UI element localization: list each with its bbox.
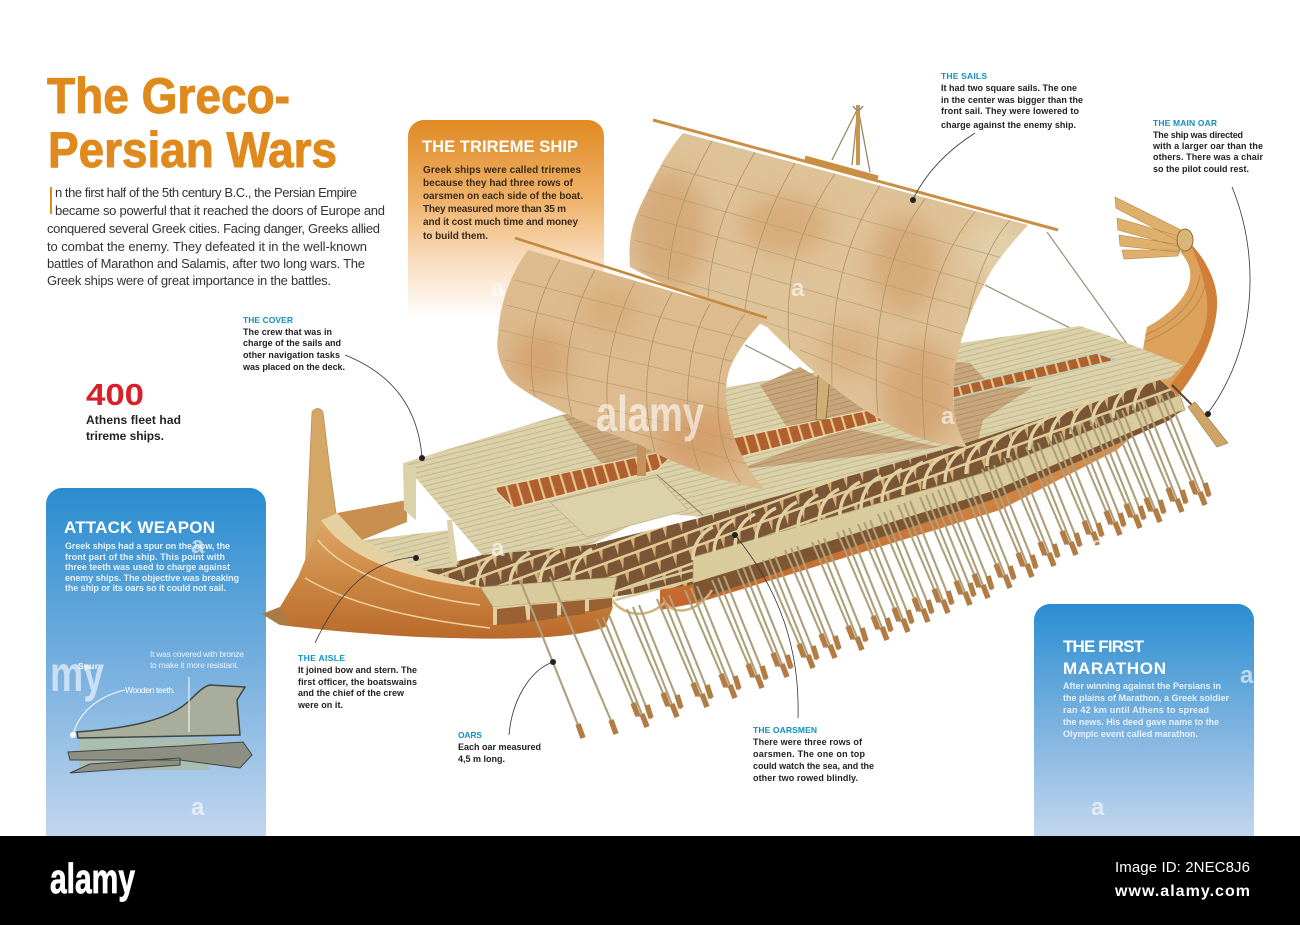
stern post and ornament — [1115, 197, 1217, 397]
callout: the sails: front sail. They were lowered to — [941, 106, 1080, 116]
watermark: a — [491, 535, 505, 562]
illustration: trireme ship — [262, 105, 1228, 738]
title — [47, 68, 337, 178]
watermark: a — [1240, 662, 1254, 689]
lattice between deck and rail — [423, 380, 1180, 597]
watermark: a — [1091, 532, 1105, 559]
callout: the sails: It had two square sails. The one — [941, 83, 1077, 93]
callout: the main oar: THE MAIN OAR — [1153, 118, 1217, 128]
ribs — [477, 377, 1154, 587]
callout: the aisle: were on it. — [297, 700, 343, 710]
watermark: my — [50, 646, 104, 702]
panel: the trireme ship: THE TRIREME SHIP — [422, 138, 578, 156]
callout: the sails: in the center was bigger than the — [941, 95, 1083, 105]
watermark: a — [1091, 794, 1105, 821]
callout: the main oar: others. There was a chair — [1153, 152, 1263, 162]
watermark: a — [491, 275, 505, 302]
callout: the main oar — [1152, 118, 1263, 417]
panel: the first marathon: After winning against the Persians in — [1063, 681, 1221, 691]
panel: the first marathon: the plains of Marathon, a Greek soldier — [1063, 693, 1229, 703]
callout: the sails: charge against the enemy ship. — [941, 120, 1076, 130]
callout: the oarsmen: THE OARSMEN — [753, 725, 817, 735]
intro text: to combat the enemy. They defeated it in the well-known — [47, 239, 367, 254]
main oar — [1172, 385, 1228, 447]
callout: the oarsmen: There were three rows of — [753, 737, 863, 747]
stat: 400 trireme ships — [86, 377, 181, 443]
watermark: a — [941, 403, 955, 430]
callout: the cover: THE COVER — [243, 315, 293, 325]
panel: the first marathon: MARATHON — [1063, 659, 1166, 678]
panel: attack weapon: the ship or its oars so it could not sail. — [65, 583, 226, 593]
panel: the trireme ship: oarsmen on each side of the boat. — [423, 191, 583, 202]
watermark: a — [791, 275, 805, 302]
panel: attack weapon: three teeth was used to charge against — [65, 562, 230, 572]
intro text: Greek ships were of great importance in the battles. — [47, 273, 331, 288]
callout: the sails: THE SAILS — [941, 71, 987, 81]
callout: oars: 4,5 m long. — [458, 754, 505, 764]
diagram: spur: Spur — [78, 661, 99, 671]
panel: attack weapon: front part of the ship. This point with — [65, 552, 225, 562]
callout: the cover — [242, 315, 425, 461]
callout: the aisle: It joined bow and stern. The — [298, 665, 417, 675]
callout: the main oar: so the pilot could rest. — [1153, 164, 1249, 174]
intro text: became so powerful that it reached the doors of Europe and — [55, 203, 385, 218]
panel: the trireme ship: because they had three rows of — [423, 178, 574, 189]
footer bar: alamy — [50, 855, 135, 902]
diagram: spur — [68, 649, 252, 773]
panel: the first marathon: ran 42 km until Athens to spread — [1063, 705, 1209, 715]
panel: the first marathon — [1034, 604, 1254, 836]
intro text — [47, 185, 385, 288]
diagram: spur: It was covered with bronze — [150, 649, 244, 659]
callout: the aisle: and the chief of the crew — [298, 688, 405, 698]
callout: oars — [458, 659, 556, 764]
masts — [637, 375, 830, 476]
intro text: n the first half of the 5th century B.C., the Persian Empire — [55, 185, 357, 200]
stat: 400 trireme ships: 400 — [86, 377, 144, 412]
footer bar: Image ID: 2NEC8J6 — [1115, 859, 1250, 876]
panel: attack weapon: ATTACK WEAPON — [64, 518, 215, 537]
callout: the sails — [910, 71, 1083, 203]
hull side right — [660, 397, 1177, 610]
stat: 400 trireme ships: trireme ships. — [86, 429, 164, 443]
main mast top — [832, 105, 870, 172]
hull and stern at left — [262, 408, 617, 639]
footer bar — [0, 836, 1300, 925]
callout: the cover: The crew that was in — [243, 327, 332, 337]
panel: the first marathon: the news. His deed gave name to the — [1063, 717, 1219, 727]
diagram: spur: to make it more resistant. — [150, 660, 239, 670]
intro text: battles of Marathon and Salamis, after two long wars. The — [47, 256, 365, 271]
front sail — [497, 238, 767, 490]
callout: oars: Each oar measured — [458, 742, 541, 752]
oars — [520, 393, 1209, 738]
callout: the cover: was placed on the deck. — [242, 362, 345, 372]
watermark — [50, 275, 1254, 821]
watermark: a — [191, 794, 205, 821]
callout: the aisle — [297, 555, 419, 710]
callout: the main oar: with a larger oar than the — [1152, 141, 1263, 151]
panel: the trireme ship: and it cost much time and money — [423, 217, 578, 228]
watermark: alamy — [596, 386, 704, 442]
panel: attack weapon — [46, 488, 266, 836]
ropes — [642, 228, 1130, 372]
footer bar: www.alamy.com — [1114, 883, 1250, 900]
rail — [612, 395, 1185, 614]
callout: the aisle: first officer, the boatswains — [298, 677, 417, 687]
main deck — [403, 326, 1183, 555]
diagram: spur: Wooden teeth. — [125, 685, 175, 695]
panel: the first marathon: THE FIRST — [1063, 637, 1145, 656]
callout: oars: OARS — [458, 730, 482, 740]
callout: the cover: charge of the sails and — [243, 338, 341, 348]
panel: the trireme ship: to build them. — [423, 231, 488, 242]
panel: the first marathon: Olympic event called marathon. — [1063, 729, 1198, 739]
intro text: conquered several Greek cities. Facing danger, Greeks allied — [47, 221, 380, 236]
callout: the aisle: THE AISLE — [298, 653, 345, 663]
callout: the oarsmen: other two rowed blindly. — [753, 773, 858, 783]
callout: the main oar: The ship was directed — [1153, 130, 1243, 140]
callout: the cover: other navigation tasks — [243, 350, 340, 360]
title: The Greco- — [47, 68, 290, 124]
title: Persian Wars — [48, 122, 337, 178]
panel: the trireme ship — [408, 120, 604, 320]
panel: attack weapon: Greek ships had a spur on the bow, the — [65, 541, 230, 551]
callout: the oarsmen — [732, 532, 874, 783]
stat: 400 trireme ships: Athens fleet had — [86, 413, 181, 427]
panel: the trireme ship: Greek ships were called triremes — [423, 165, 581, 176]
panel: attack weapon: enemy ships. The objective was breaking — [65, 573, 239, 583]
callout: the oarsmen: could watch the sea, and the — [753, 761, 874, 771]
callout: the oarsmen: oarsmen. The one on top — [753, 749, 866, 759]
panel: the trireme ship: They measured more than 35 m — [423, 204, 566, 215]
watermark: a — [191, 532, 205, 559]
rear sail — [629, 120, 1058, 450]
